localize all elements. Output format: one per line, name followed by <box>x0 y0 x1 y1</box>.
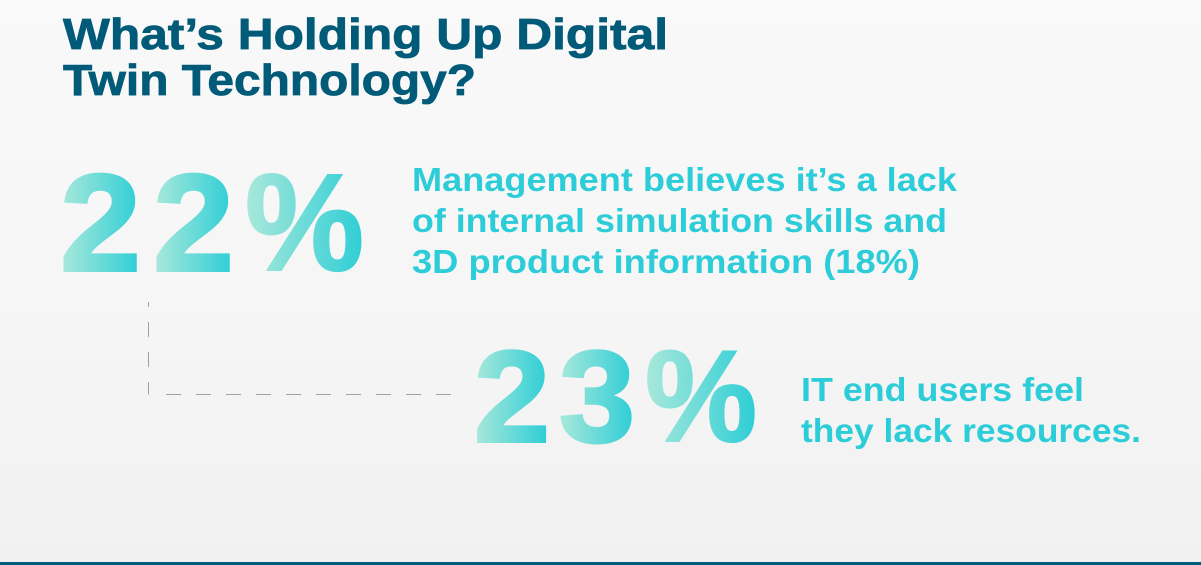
statistic: 23% <box>474 323 757 470</box>
text: IT end users statistic <box>801 371 1141 449</box>
text: management statistic: 3D product information (18%) <box>412 243 920 280</box>
statistic: 22%: 2 <box>153 146 234 300</box>
statistic: 23%: 2 <box>474 324 550 470</box>
text: management statistic: of internal simulation skills and <box>412 202 947 239</box>
statistic: 22%: 2 <box>60 146 141 300</box>
statistic: 22%: % <box>245 146 364 300</box>
bottom bar <box>0 562 1201 565</box>
text: IT end users statistic: they lack resources. <box>801 412 1141 449</box>
text: IT end users statistic: IT end users feel <box>801 371 1084 408</box>
title <box>63 10 668 105</box>
title: What’s Holding Up Digital <box>63 10 668 59</box>
statistic: 23%: % <box>645 323 757 469</box>
text: management statistic <box>412 161 958 280</box>
text: management statistic: Management believes it’s a lack <box>412 161 958 198</box>
title: Twin Technology? <box>63 56 476 105</box>
statistic: 22% <box>60 146 364 300</box>
dashed connector <box>148 302 451 394</box>
statistic: 23%: 3 <box>559 324 635 470</box>
